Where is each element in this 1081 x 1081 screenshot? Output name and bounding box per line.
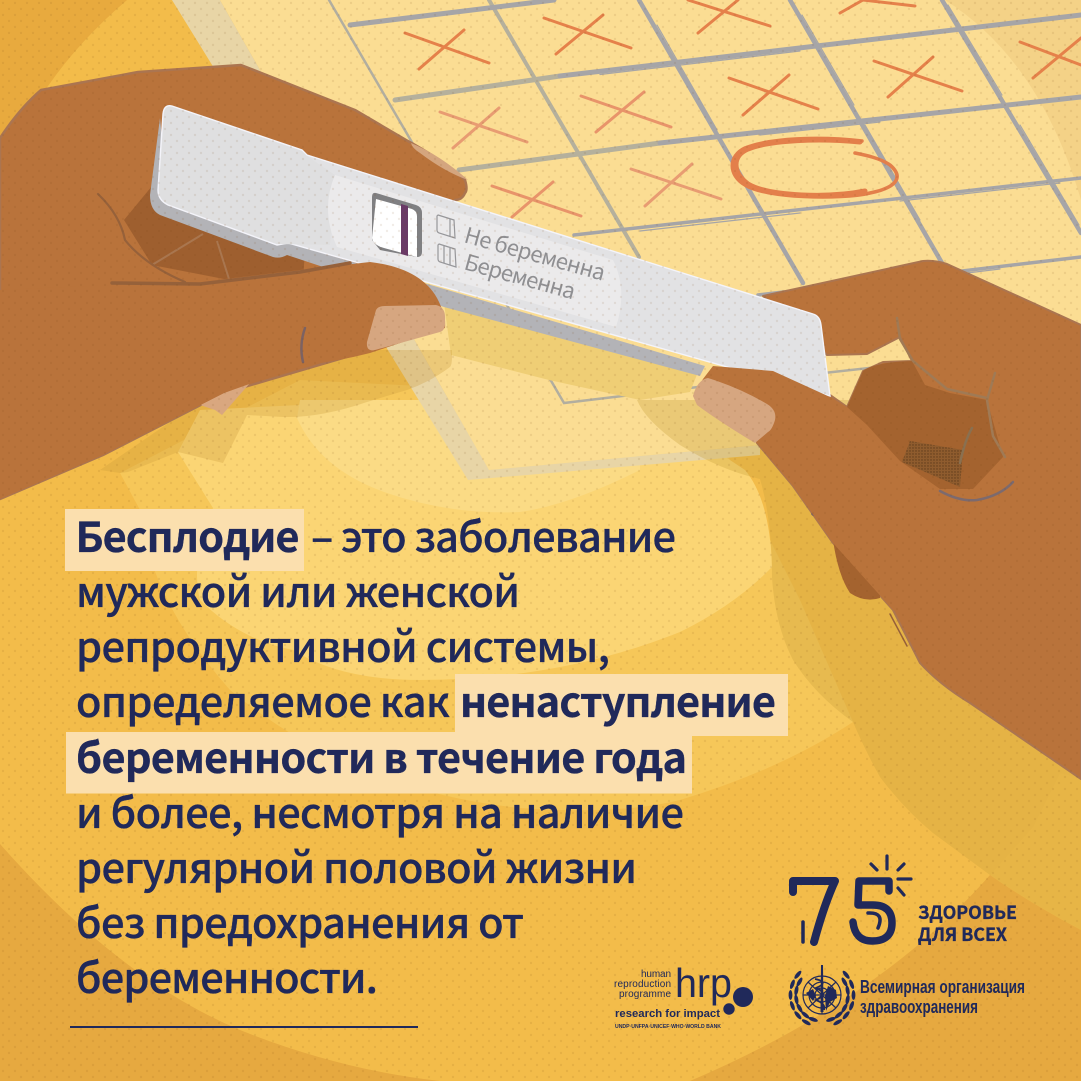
pregnancy test strip (150, 106, 830, 396)
calendar paper (172, 0, 1081, 480)
text block: мужской или женской (76, 559, 520, 619)
logo: HRP: hrp (675, 960, 732, 1006)
text block: ненаступление (460, 669, 776, 729)
palm shadow (124, 186, 305, 280)
logo: WHO 75 years: ДЛЯ ВСЕХ (918, 921, 1008, 947)
logo: HRP: research for impact (615, 1008, 720, 1020)
thumb nail (693, 378, 775, 443)
translucent hand and strip shadows (100, 303, 1081, 875)
icon: two lines (438, 244, 456, 267)
logo: HRP: programme (619, 989, 671, 1000)
label: not pregnant: Не беременна (461, 218, 609, 287)
divider rule (70, 1026, 418, 1028)
right thumb (693, 366, 960, 640)
red crosses marking days (405, 0, 1081, 217)
highlight: infertility (65, 509, 304, 571)
highlight: no pregnancy within a year, line two (66, 732, 692, 794)
right hand: palm and index finger (757, 261, 1081, 779)
highlight: no pregnancy within a year, line one (455, 674, 788, 736)
lower finger shadow (833, 540, 880, 600)
logo: WHO 75 years: ЗДОРОВЬЕ (918, 899, 1017, 925)
logo: WHO 75 years (793, 856, 1017, 947)
logo: HRP (614, 960, 753, 1030)
emblem laurel (789, 970, 855, 1026)
text block: без предохранения от (76, 890, 524, 950)
icon: one line (437, 215, 455, 238)
logo: WHO emblem (789, 965, 855, 1026)
result panel (328, 175, 621, 327)
strip handle (159, 107, 335, 245)
text block: Бесплодие (76, 504, 300, 564)
text block: – это заболевание (311, 504, 676, 564)
WHO name (860, 977, 1025, 1017)
sun rays (871, 856, 911, 895)
palm fold (98, 194, 185, 282)
logo: HRP: human (641, 969, 671, 980)
thumb crease (112, 263, 350, 284)
WHO name: здравоохранения (860, 997, 978, 1017)
index finger nail (411, 143, 468, 180)
result window (372, 193, 422, 257)
left thumb (0, 194, 445, 499)
palm shadow lines (152, 234, 229, 279)
left hand: palm and index finger (0, 65, 468, 499)
text block: беременности. (76, 945, 378, 1005)
purple result line (401, 204, 408, 256)
hidden fingertip under hand (200, 383, 250, 415)
emblem continents (806, 986, 837, 1011)
digit 7 (793, 881, 835, 942)
text block: репродуктивной системы, (76, 614, 610, 674)
logo: HRP: reproduction (614, 979, 671, 990)
palm shadow (847, 361, 1003, 489)
emblem staff (820, 965, 824, 1012)
thumb nail (367, 305, 445, 350)
text block: определяемое как (76, 669, 450, 729)
strip top face (158, 106, 830, 396)
text block (65, 504, 788, 1005)
label: pregnant: Беременна (461, 245, 580, 306)
digit 5 (853, 881, 892, 941)
text block: беременности в течение года (76, 725, 687, 785)
text block: регулярной половой жизни (76, 835, 637, 895)
calendar grid (329, 0, 1081, 403)
knuckle mark (301, 328, 305, 362)
red circle around date (732, 138, 897, 197)
textured shadow patch (902, 441, 963, 487)
text block: и более, несмотря на наличие (76, 780, 684, 840)
logo: HRP: UNDP·UNFPA·UNICEF·WHO·WORLD BANK (615, 1024, 721, 1030)
hand creases (813, 318, 1013, 646)
strip side (150, 118, 705, 376)
WHO name: Всемирная организация (860, 977, 1025, 997)
